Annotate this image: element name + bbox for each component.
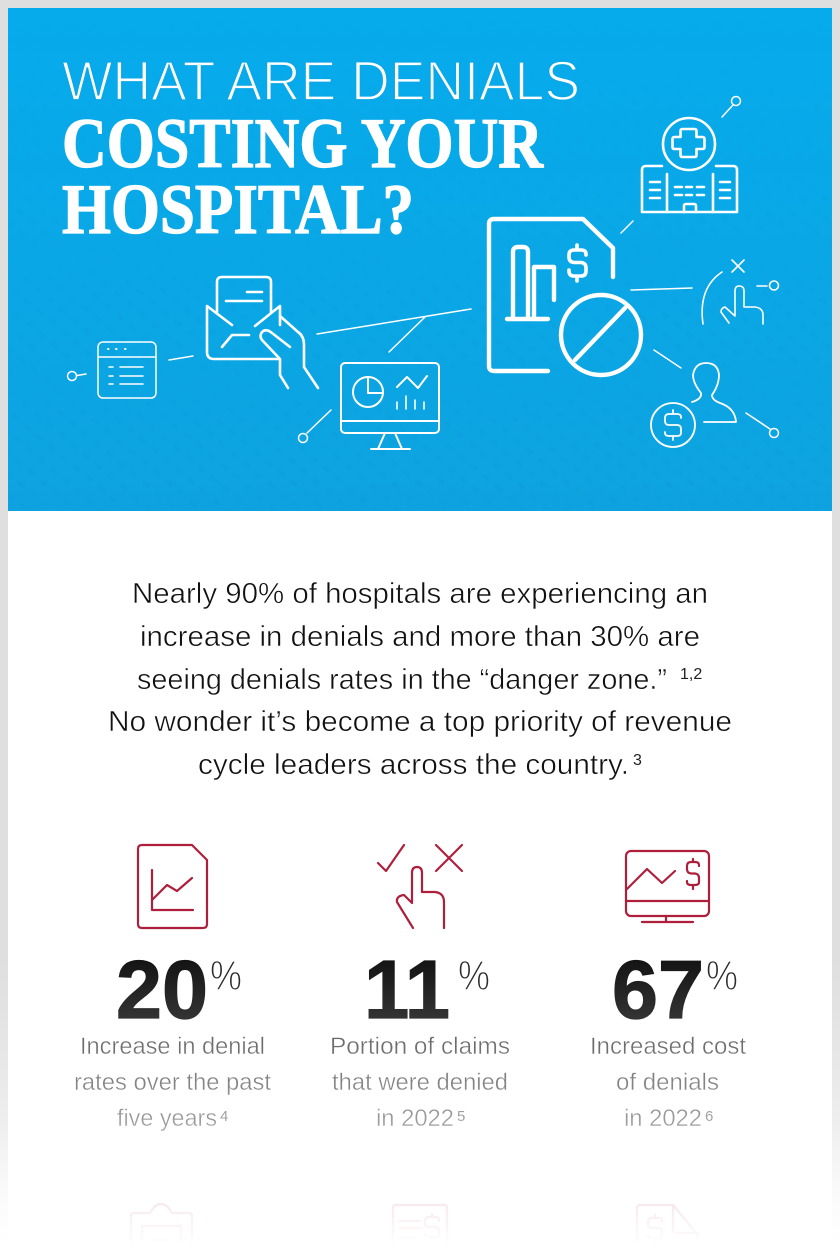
stat: 20 percent [74, 845, 271, 1132]
icon: person with dollar [651, 363, 736, 447]
stat: 11 percent: Portion of claims [330, 1033, 510, 1060]
title [62, 49, 580, 249]
title: COSTING YOUR [62, 105, 544, 183]
faded icon: document with dollar [637, 1205, 698, 1260]
stat: 67 percent: 67 [612, 943, 704, 1036]
stat: 20 percent: 20 [116, 943, 208, 1036]
stat: 11 percent: in 2022 [376, 1105, 454, 1132]
connector lines and pins [68, 96, 778, 442]
icon: monitor with charts [341, 363, 439, 449]
intro paragraph: No wonder it’s become a top priority of revenue [108, 706, 732, 738]
stat: 20 percent: Increase in denial [80, 1033, 265, 1060]
icon: denied financial document [489, 219, 641, 375]
intro paragraph: increase in denials and more than 30% are [140, 621, 700, 653]
stat: 11 percent: % [458, 952, 490, 999]
stat: 20 percent: five years [117, 1105, 217, 1132]
intro paragraph: Nearly 90% of hospitals are experiencing an [132, 578, 708, 610]
stat: 20 percent: % [210, 952, 242, 999]
title: HOSPITAL? [62, 171, 414, 249]
stat: 67 percent [590, 851, 746, 1132]
stat: 11 percent: 11 [364, 943, 450, 1036]
intro paragraph: seeing denials rates in the “danger zone.” [137, 664, 667, 696]
intro paragraph [108, 578, 732, 781]
title: WHAT ARE DENIALS [62, 49, 580, 112]
stat: 67 percent: Increased cost [590, 1033, 746, 1060]
icon: hospital [642, 118, 737, 212]
hero banner [8, 8, 832, 511]
icon: document with line chart [138, 845, 207, 928]
stat: 20 percent: 4 [220, 1108, 228, 1125]
stat: 11 percent: 5 [457, 1108, 465, 1125]
icon: browser list [98, 342, 156, 398]
stat: 11 percent: that were denied [332, 1069, 508, 1096]
stat: 67 percent: in 2022 [624, 1105, 702, 1132]
faded icon: clipboard [131, 1204, 210, 1260]
icon: hand with check and cross [378, 845, 462, 928]
intro paragraph: cycle leaders across the country. [198, 749, 629, 781]
intro paragraph: 1,2 [680, 666, 702, 683]
icon: monitor with cost trend [626, 851, 709, 922]
stat: 20 percent: rates over the past [74, 1069, 271, 1096]
stat: 67 percent: of denials [616, 1069, 719, 1096]
icon: envelope and hand [207, 277, 318, 388]
stat: 11 percent [330, 845, 510, 1132]
faded icon: bill in envelope [378, 1205, 462, 1260]
intro paragraph: 3 [633, 752, 642, 769]
stat: 67 percent: % [706, 952, 738, 999]
stat: 67 percent: 6 [705, 1108, 713, 1125]
icon: hand tap with cross [702, 260, 778, 324]
